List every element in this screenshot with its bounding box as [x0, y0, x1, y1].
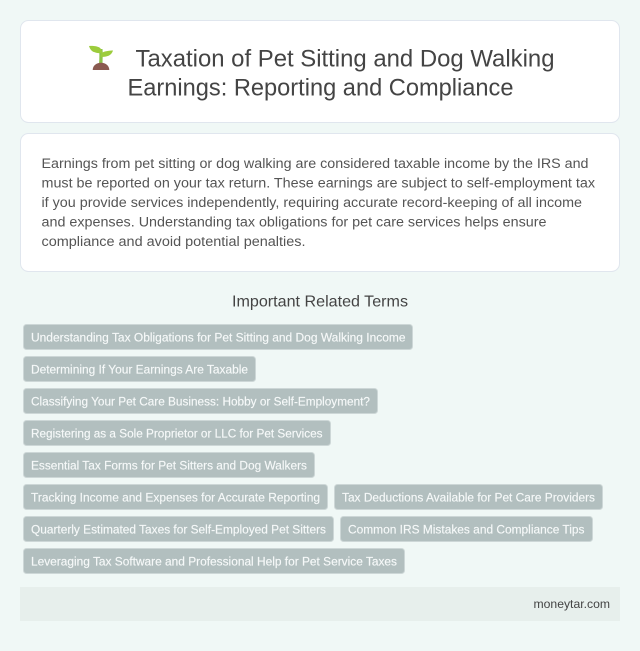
- tag: registering: [24, 420, 330, 446]
- text block: description: Earnings from pet sitting or dog walking are considered taxable income by the IRS and: [42, 156, 588, 172]
- text block: description: and expenses. Understanding tax obligations for pet care services helps ensure: [42, 214, 547, 230]
- heading: important related terms: Important Related Terms: [232, 294, 408, 310]
- tag: understanding tax obligations: [24, 324, 412, 350]
- footer: moneytar.com: [534, 597, 610, 611]
- tag: tracking income: Tracking Income and Expenses for Accurate Reporting: [31, 490, 320, 504]
- tag: determining taxable earnings: [24, 356, 256, 382]
- tag: quarterly estimated taxes: [24, 516, 334, 542]
- tag: tax deductions: [334, 484, 602, 510]
- tag: understanding tax obligations: Understanding Tax Obligations for Pet Sitting and Dog Walking Income: [31, 330, 406, 344]
- text block: description: compliance and avoid potential penalties.: [42, 234, 306, 250]
- icon: seedling: [89, 46, 113, 70]
- tag: common IRS mistakes: [340, 516, 592, 542]
- tag: determining taxable earnings: Determining If Your Earnings Are Taxable: [31, 362, 248, 376]
- tag list: [24, 324, 602, 574]
- title: Taxation of Pet Sitting and Dog Walking: [136, 46, 554, 72]
- tag: quarterly estimated taxes: Quarterly Estimated Taxes for Self-Employed Pet Sitters: [31, 522, 326, 536]
- title: [128, 46, 554, 102]
- tag: essential tax forms: [24, 452, 314, 478]
- tag: classifying business: Classifying Your Pet Care Business: Hobby or Self-Employment?: [31, 394, 370, 408]
- title: Earnings: Reporting and Compliance: [128, 74, 514, 102]
- tag: classifying business: [24, 388, 378, 414]
- panel: title card: [20, 20, 620, 122]
- panel: description card: [20, 134, 620, 272]
- text block: description: [42, 156, 595, 250]
- tag: tax deductions: Tax Deductions Available for Pet Care Providers: [342, 490, 595, 504]
- text block: description: if you provide services independently, requiring accurate record-keeping of all income: [42, 195, 582, 211]
- tag: registering: Registering as a Sole Proprietor or LLC for Pet Services: [31, 426, 322, 440]
- tag: common IRS mistakes: Common IRS Mistakes and Compliance Tips: [348, 522, 584, 536]
- tag: leveraging tax software: Leveraging Tax Software and Professional Help for Pet Service Taxes: [31, 554, 397, 568]
- text block: description: must be reported on your tax return. These earnings are subject to self-employment tax: [42, 176, 595, 192]
- tag: essential tax forms: Essential Tax Forms for Pet Sitters and Dog Walkers: [31, 458, 307, 472]
- tag: leveraging tax software: [24, 548, 404, 574]
- footer: [20, 587, 620, 621]
- tag: tracking income: [24, 484, 328, 510]
